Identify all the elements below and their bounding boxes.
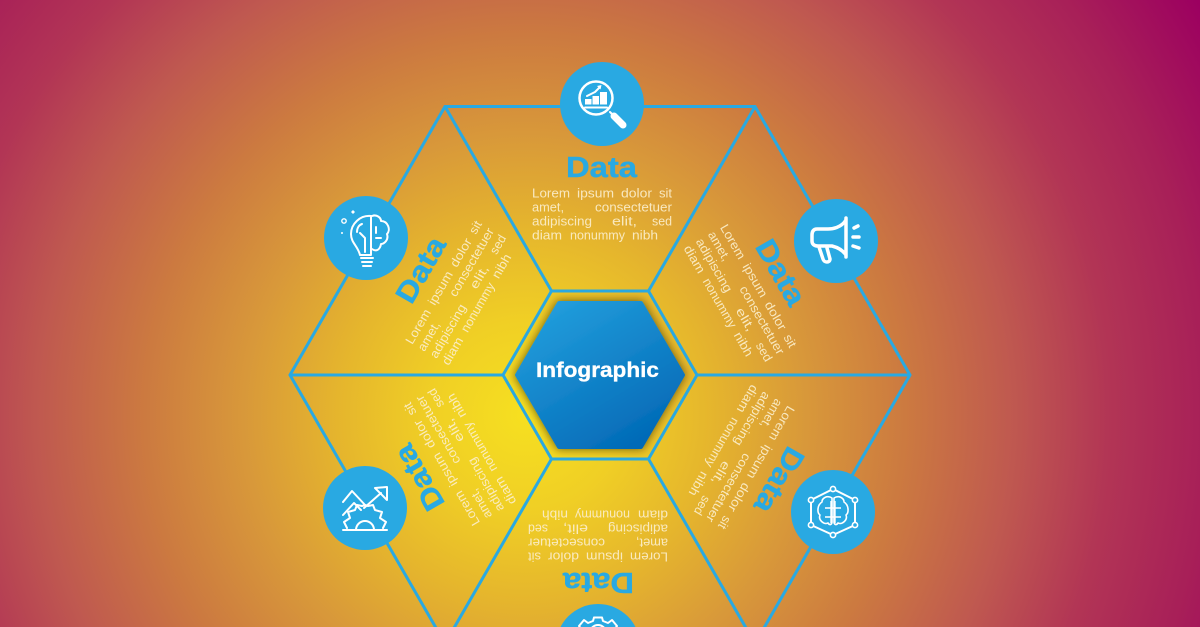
text block: upper right body: dolor: [762, 299, 789, 333]
text block: upper right body: sit: [781, 332, 800, 351]
text block: bottom body: sit: [527, 550, 541, 564]
text block: lower right body: Lorem: [766, 403, 797, 443]
icon: lightbulb brain: [324, 196, 408, 280]
text block: lower left body: nibh: [444, 391, 469, 421]
text block: lower right body: nonummy: [702, 415, 742, 471]
panel: upper right: [681, 205, 829, 372]
text block: lower right body: elit,: [708, 459, 733, 487]
text block: top body: adipiscing: [532, 214, 592, 228]
text block: lower right body: dolor: [725, 480, 753, 514]
text block: upper left body: sit: [466, 218, 485, 237]
text block: top body: amet,: [532, 200, 564, 214]
text block: top body: elit,: [612, 214, 637, 228]
icon: gear at bottom: [556, 604, 640, 627]
text block: lower left body: nonummy: [460, 419, 500, 474]
text block: lower left body: [400, 378, 519, 528]
text block: bottom body: ipsum: [586, 550, 623, 564]
text block: lower right body: diam: [734, 382, 761, 415]
text block: bottom body: dolor: [548, 550, 579, 564]
text block: lower left body: amet,: [467, 486, 495, 521]
text block: top body: nonummy: [570, 228, 626, 242]
text block: top body: consectetuer: [595, 200, 672, 214]
icon: megaphone: [794, 199, 878, 283]
text block: upper left body: sed: [487, 232, 509, 257]
text block: lower right body: sit: [715, 513, 734, 532]
text block: lower right body: consectetuer: [703, 451, 754, 525]
text block: upper left body: [403, 218, 522, 368]
text block: upper right body: ipsum: [740, 261, 770, 300]
text block: bottom body: sed: [528, 522, 548, 536]
text block: top body: nibh: [632, 228, 658, 242]
text block: upper right body: consectetuer: [736, 283, 787, 357]
text block: upper left body: elit,: [467, 263, 492, 291]
text block: upper left body: adipiscing: [427, 302, 469, 361]
text block: lower left body: ipsum: [430, 450, 460, 489]
panel: lower right: [678, 382, 827, 549]
text block: lower right body: nibh: [686, 469, 711, 499]
text block: upper right body: nibh: [731, 329, 756, 359]
text block: upper left body: consectetuer: [446, 225, 497, 299]
text block: upper right body: amet,: [705, 229, 733, 264]
text block: upper left body: nibh: [489, 251, 514, 281]
text block: lower left body: elit,: [443, 416, 467, 445]
text block: bottom body: consectetuer: [528, 536, 605, 550]
text block: top body: ipsum: [577, 186, 614, 200]
text block: bottom body: elit,: [563, 522, 588, 536]
panel: lower left: [371, 378, 519, 545]
icon: magnifier with chart: [560, 62, 644, 146]
center title: Infographic: [536, 359, 659, 382]
text block: lower right body: amet,: [757, 396, 785, 431]
text block: top body: [532, 186, 673, 242]
text block: top body: sed: [652, 214, 672, 228]
text block: bottom body: Lorem: [630, 550, 668, 564]
heading: top data: Data: [566, 152, 638, 184]
hexagon frame lines: [290, 106, 910, 627]
text block: lower right body: adipiscing: [731, 389, 773, 448]
heading: lower right data: Data: [746, 441, 810, 519]
text block: bottom body: nonummy: [574, 508, 630, 522]
text block: bottom body: nibh: [542, 508, 568, 522]
panel: upper left: [373, 201, 522, 368]
heading: bottom data: Data: [562, 566, 634, 598]
text block: lower left body: dolor: [411, 417, 438, 451]
panel: top: [532, 152, 673, 242]
text block: upper right body: elit,: [733, 305, 757, 334]
icon: gear with growth arrow: [323, 466, 407, 550]
text block: upper right body: [681, 222, 800, 372]
text block: lower right body: ipsum: [744, 442, 775, 481]
text block: lower left body: sit: [400, 399, 419, 418]
text block: bottom body: diam: [638, 508, 668, 522]
text block: top body: sit: [659, 186, 673, 200]
text block: upper left body: dolor: [447, 236, 475, 270]
text block: upper right body: adipiscing: [693, 236, 735, 295]
text block: upper left body: amet,: [415, 319, 443, 354]
text block: upper right body: diam: [681, 243, 708, 276]
text block: upper left body: nonummy: [458, 279, 498, 335]
text block: upper left body: Lorem: [403, 307, 434, 347]
text block: upper right body: sed: [753, 340, 775, 364]
text block: bottom body: amet,: [636, 536, 668, 550]
text block: bottom body: [527, 508, 668, 564]
text block: bottom body: adipiscing: [608, 522, 668, 536]
text block: upper left body: diam: [439, 335, 466, 368]
heading: upper right data: Data: [748, 234, 812, 312]
text block: lower left body: consectetuer: [413, 393, 464, 467]
text block: upper right body: nonummy: [700, 276, 740, 331]
text block: top body: Lorem: [532, 186, 570, 200]
text block: upper right body: Lorem: [717, 222, 748, 262]
text block: lower left body: Lorem: [452, 488, 483, 528]
panel: bottom: [527, 508, 668, 598]
heading: lower left data: Data: [388, 438, 452, 516]
center hexagon: [517, 303, 683, 447]
text block: top body: dolor: [621, 186, 652, 200]
text block: upper left body: ipsum: [425, 269, 456, 308]
text block: lower left body: adipiscing: [465, 455, 507, 514]
text block: top body: diam: [532, 228, 562, 242]
text block: lower left body: sed: [425, 386, 447, 410]
text block: lower left body: diam: [492, 474, 519, 507]
heading: upper left data: Data: [390, 231, 454, 309]
text block: lower right body: [678, 382, 797, 532]
text block: lower right body: sed: [691, 493, 713, 518]
icon: brain network: [791, 470, 875, 554]
